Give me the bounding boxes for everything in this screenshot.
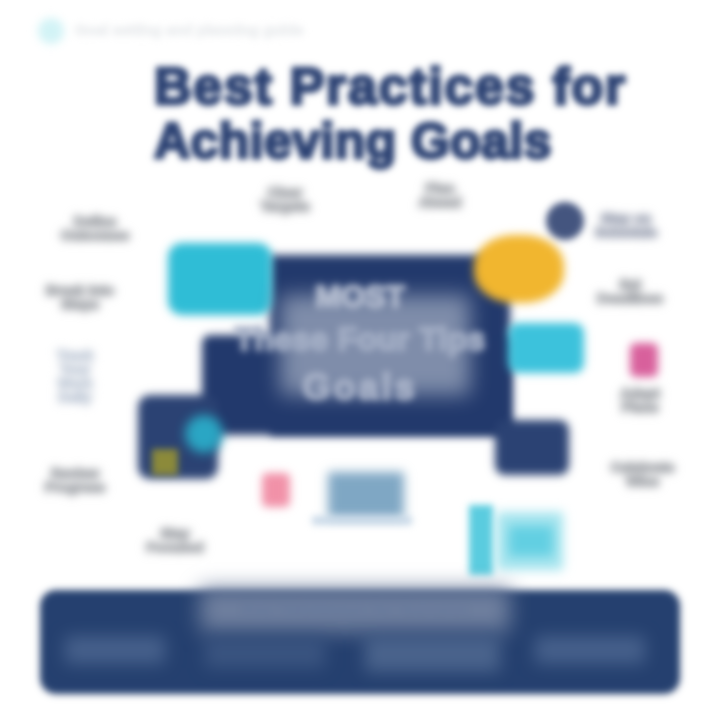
title: Best Practices for (154, 58, 627, 116)
label: left two (40, 280, 119, 317)
dot caption: Stay on (601, 210, 651, 226)
teal bar left (469, 505, 493, 575)
label: bottom left: Focused (146, 539, 204, 555)
label: right one: Deadlines (597, 290, 663, 306)
central text (230, 279, 490, 407)
icon: navy dot (546, 202, 584, 240)
label: left two: Steps (61, 296, 99, 312)
navy upper body (270, 255, 510, 435)
label: left four (39, 462, 110, 500)
label: right three: Wins (626, 473, 659, 489)
icon: teal rounded block (168, 243, 272, 315)
label: right two: Adapt (620, 385, 660, 401)
label: top centre left (256, 181, 315, 220)
label: left two: Break Into (46, 282, 114, 298)
icon: left navy card (138, 395, 218, 479)
bar column one (65, 636, 165, 664)
navy right foot (495, 420, 569, 475)
label: left one (56, 210, 134, 246)
title (149, 58, 631, 176)
title: Achieving Goals (154, 113, 552, 169)
label: left one: Define (74, 213, 116, 229)
label: left one: Outcomes (61, 227, 129, 243)
label: top centre left: Clear (267, 184, 303, 200)
panel: bottom navy bar (34, 572, 686, 700)
label: right one (592, 274, 668, 310)
bar top highlight (200, 588, 510, 632)
label: top centre left: Targets (260, 198, 310, 214)
label: right one: Set (619, 276, 641, 292)
bar background (40, 590, 680, 694)
header caption: Goal setting and planning guide (75, 22, 303, 39)
label: left three (54, 346, 98, 409)
icon: teal dot (38, 18, 64, 44)
label: left three: Work (58, 375, 92, 391)
panel: central navy block (130, 228, 592, 486)
label: left three: Your (60, 361, 90, 377)
label: top centre right: Plan (425, 180, 455, 196)
label: right three (606, 456, 680, 492)
label: bottom left (141, 522, 210, 558)
label: right two: Plans (621, 399, 659, 415)
label: left three: Daily (58, 389, 92, 405)
central text: MOST (315, 279, 405, 314)
label: top centre right: Ahead (419, 194, 461, 210)
bar column two (205, 638, 325, 668)
bar heading: Key Takeaways for Success (242, 600, 468, 619)
label: left four: Review (51, 465, 99, 481)
label with navy dot (540, 196, 662, 246)
icon: teal accent on card (185, 415, 223, 453)
bar column four (535, 636, 645, 664)
dot caption (590, 207, 662, 244)
icon: yellow square on card (152, 449, 178, 475)
icon: teal right block (508, 323, 584, 373)
central text: These Four Tips (234, 321, 486, 357)
label: top centre right (414, 177, 467, 214)
central haze (280, 295, 470, 395)
header tag line (34, 14, 303, 48)
label: right three: Celebrate (611, 459, 674, 475)
icon: yellow circle (474, 235, 564, 303)
icon: pink badge (630, 343, 658, 377)
navy middle band (202, 335, 512, 435)
label: right two (616, 382, 666, 419)
dot caption: Schedule (595, 224, 657, 240)
icon: pink square (262, 473, 290, 507)
blue text block (328, 472, 404, 518)
central text: Goals (302, 366, 418, 407)
label: left four: Progress (45, 479, 105, 495)
label: bottom left: Stay (160, 525, 190, 541)
label: left three: Track (57, 347, 93, 363)
bar column three (365, 636, 500, 672)
icon: teal chart (463, 499, 570, 580)
blue text caption (312, 516, 412, 525)
teal panel right (497, 512, 563, 570)
teal darker inner (509, 526, 553, 556)
